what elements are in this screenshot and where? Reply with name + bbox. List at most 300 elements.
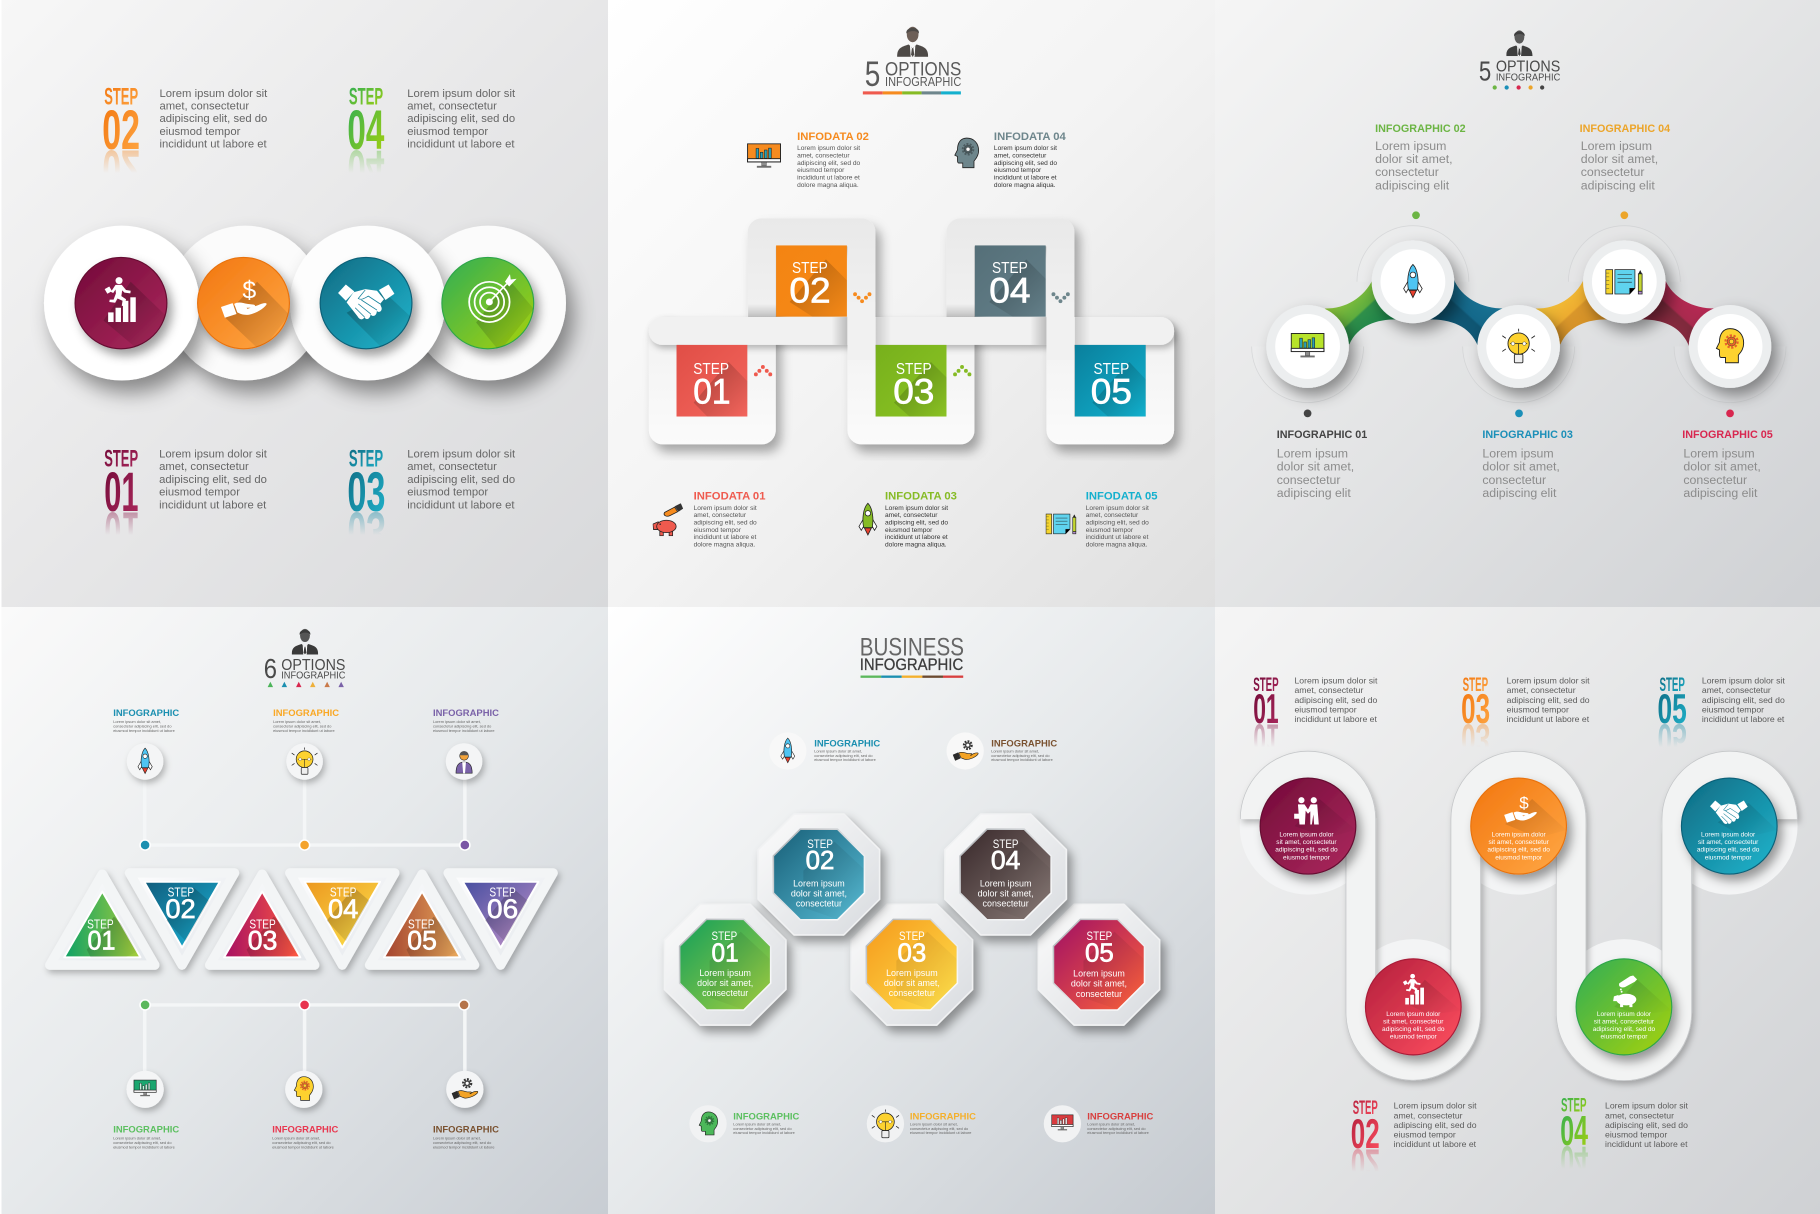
step 04 text: Lorem ipsum dolor sit (1605, 1101, 1689, 1111)
infographic 05: adipiscing elit (1683, 486, 1758, 500)
big white circle 3 (290, 226, 445, 381)
infographic 03: Lorem ipsum (1482, 447, 1554, 461)
step 02 text: amet, consectetur (1394, 1110, 1463, 1120)
panel: six triangles (50, 629, 553, 1150)
top caption 1: consectetur adipiscing elit, sed do (113, 724, 172, 729)
step 03 label: STEP (349, 447, 383, 472)
band shadows near crossings (832, 317, 1090, 345)
octagon step 01: Lorem ipsum (699, 968, 751, 978)
infodata 02: adipiscing elit, sed do (797, 160, 861, 167)
step 02 label: 02 (1351, 1111, 1380, 1157)
node step 02: Lorem ipsum dolor (1386, 1011, 1441, 1018)
infodata 03: dolore magna aliqua. (885, 541, 947, 548)
ribbon: legs crossing over band (847, 302, 1074, 360)
title: 6 options infographic: OPTIONS (281, 657, 345, 674)
triangle step 03: STEP (249, 916, 276, 931)
octagon step 01: 01 (712, 940, 739, 968)
step 04 label: 04 (347, 139, 384, 200)
infographic 05 (1682, 429, 1773, 500)
octagon step 03: 03 (897, 940, 926, 968)
node step 01: adipiscing elit, sed do (1275, 847, 1338, 854)
step numbers on squares: STEP (992, 260, 1028, 277)
octagon step 02 (758, 814, 880, 935)
bottom caption 3: Lorem ipsum dolor sit amet, (433, 1136, 481, 1141)
top caption 2: eiusmod tempor incididunt ut labore (273, 728, 335, 733)
infodata 01: eiusmod tempor (694, 527, 742, 534)
bottom caption 3: eiusmod tempor incididunt ut labore (433, 1145, 494, 1150)
octagon step 01: consectetur (702, 988, 748, 998)
step 04 text: eiusmod tempor (407, 126, 488, 138)
infodata 01: incididunt ut labore et (694, 534, 756, 541)
item: monitor: consectetur adipiscing elit, sed do (1087, 1126, 1146, 1131)
connector amber (1536, 279, 1607, 345)
serpentine band outline (1255, 766, 1783, 1066)
item: rocket: INFOGRAPHIC (814, 738, 880, 749)
step 05 text: amet, consectetur (1702, 685, 1771, 695)
infographic 05: consectetur (1683, 473, 1747, 487)
node 2 rocket (1372, 240, 1454, 323)
bottom caption 2: consectetur adipiscing elit, sed do (272, 1140, 331, 1145)
connector green (1325, 279, 1396, 345)
step 04 text: incididunt ut labore et (1605, 1139, 1688, 1149)
top caption 1: INFOGRAPHIC (113, 707, 179, 718)
infographic 01: consectetur (1277, 473, 1341, 487)
infodata 03: incididunt ut labore et (885, 534, 948, 541)
node step 02: eiusmod tempor (1390, 1034, 1438, 1041)
node step 04: eiusmod tempor (1601, 1034, 1648, 1041)
step 03 text: adipiscing elit, sed do (407, 474, 515, 486)
infodata 02: amet, consectetur (797, 153, 850, 160)
infodata 02: Lorem ipsum dolor sit (797, 145, 860, 152)
ribbon: horizontal band (649, 317, 1174, 345)
infodata 02 (797, 131, 869, 189)
step 03 text: adipiscing elit, sed do (1507, 695, 1590, 705)
infographic 01 (1277, 429, 1367, 500)
step 03 text: Lorem ipsum dolor sit (407, 449, 516, 461)
node step 04: sit amet, consectetur (1594, 1018, 1655, 1025)
step 01 label: STEP (104, 447, 138, 472)
octagon step 03: STEP (899, 930, 925, 943)
step 01 label (104, 447, 138, 562)
infodata 02: incididunt ut labore et (797, 174, 860, 181)
infodata 04: incididunt ut labore et (994, 174, 1057, 181)
connector lines (145, 779, 465, 1072)
leg shadows above band (748, 304, 975, 317)
step numbers on squares: STEP (1094, 361, 1129, 378)
step 04 text: amet, consectetur (407, 100, 497, 112)
step 02 text: incididunt ut labore et (1394, 1139, 1477, 1149)
step 04 label (1560, 1095, 1588, 1184)
triangle step 06: STEP (489, 885, 516, 900)
infodata 05: Lorem ipsum dolor sit (1086, 505, 1149, 512)
disc: climbing runner (75, 257, 167, 351)
octagon step 02: 02 (806, 847, 834, 875)
node step 03: Lorem ipsum dolor (1492, 832, 1547, 839)
bottom caption 2 (272, 1124, 339, 1150)
triangle step 05: STEP (408, 916, 435, 931)
node step 02 (1365, 959, 1461, 1055)
octagon step 02: consectetur (796, 899, 842, 909)
node step 01: eiusmod tempor (1283, 854, 1331, 861)
step 04 text: amet, consectetur (1605, 1110, 1674, 1120)
step 02 label: 02 (102, 99, 140, 161)
node 4 notepad (1583, 240, 1666, 323)
infodata 04: dolore magna aliqua. (994, 182, 1056, 189)
triangle step 04: STEP (330, 885, 356, 900)
step 01 text: incididunt ut labore et (1294, 714, 1378, 724)
top caption 1: Lorem ipsum dolor sit amet, (113, 719, 161, 724)
node 1 monitor (1266, 305, 1349, 388)
title: 6 options infographic: INFOGRAPHIC (281, 671, 345, 682)
infodata 03: adipiscing elit, sed do (885, 519, 948, 526)
octagon step 05: STEP (1087, 930, 1112, 943)
background: panel 4 (2, 607, 608, 1214)
node step 04: Lorem ipsum dolor (1597, 1011, 1652, 1018)
octagon step 05 (1038, 904, 1160, 1025)
node step 03 (1471, 778, 1566, 874)
node step 05: sit amet, consectetur (1698, 839, 1759, 846)
background: panel 6 (1215, 607, 1820, 1214)
top caption 3: eiusmod tempor incididunt ut labore (433, 728, 494, 733)
infodata 03: amet, consectetur (885, 512, 938, 519)
step 04 label: 04 (347, 99, 384, 161)
node step 05 (1681, 778, 1777, 874)
item: rocket: consectetur adipiscing elit, sed do (814, 753, 873, 758)
octagon step 04 (945, 814, 1066, 935)
title: 5 options infographic: 5 (865, 55, 880, 94)
colour bar (861, 676, 963, 678)
node 3 bulb (1477, 305, 1560, 388)
node step 02: sit amet, consectetur (1383, 1018, 1444, 1025)
octagon step 04: Lorem ipsum (980, 879, 1031, 888)
triangle step 02: STEP (168, 885, 194, 900)
item: rocket (769, 732, 880, 770)
infographic 04 (1580, 123, 1670, 192)
item: bulb: eiusmod tempor incididunt ut labore (910, 1130, 971, 1135)
item: head (689, 1105, 800, 1142)
colour bar (863, 91, 961, 94)
triangle step 01 (50, 874, 155, 965)
step 03 text: amet, consectetur (1507, 685, 1576, 695)
bottom caption 2: Lorem ipsum dolor sit amet, (272, 1136, 320, 1141)
panel: wavy connected circles (1252, 30, 1786, 500)
infodata 01: Lorem ipsum dolor sit (694, 505, 757, 512)
infographic 03 (1482, 429, 1573, 500)
step 04 text: incididunt ut labore et (407, 139, 515, 151)
node step 05: Lorem ipsum dolor (1701, 832, 1756, 839)
background: panel 3 (1215, 0, 1820, 607)
step 04 label: STEP (349, 85, 383, 111)
step 04 text: adipiscing elit, sed do (1605, 1120, 1688, 1130)
step 01 label: 01 (104, 501, 138, 562)
top caption 2: consectetur adipiscing elit, sed do (273, 724, 331, 729)
infodata 01: amet, consectetur (694, 512, 747, 519)
item: monitor: eiusmod tempor incididunt ut labore (1087, 1130, 1149, 1135)
step 04 label: 04 (1560, 1138, 1588, 1184)
step 02 text: Lorem ipsum dolor sit (159, 88, 268, 100)
title: 6 options infographic (264, 653, 345, 684)
octagon step 01: STEP (712, 930, 737, 943)
step 03 label: STEP (1463, 675, 1488, 696)
title: 5 options infographic: INFOGRAPHIC (885, 74, 962, 89)
triangle step 03: 03 (248, 925, 277, 956)
bottom caption 1: INFOGRAPHIC (113, 1124, 179, 1135)
octagon step 05: Lorem ipsum (1073, 969, 1125, 979)
icon circle: hand with gear (446, 1071, 484, 1108)
octagon step 02: dolor sit amet, (791, 889, 847, 899)
step 01 text: amet, consectetur (1294, 685, 1364, 695)
infographic 05: Lorem ipsum (1683, 447, 1755, 461)
step 04 label (347, 85, 384, 200)
item: hand with gear: Lorem ipsum dolor sit amet, (991, 749, 1039, 754)
node step 04: adipiscing elit, sed do (1593, 1026, 1656, 1033)
coloured triangles (268, 682, 344, 687)
top caption 2: Lorem ipsum dolor sit amet, (273, 719, 321, 724)
top caption 3: Lorem ipsum dolor sit amet, (433, 719, 481, 724)
marker dots (1304, 211, 1734, 417)
panel: business octagons (664, 633, 1160, 1142)
step 05 square (1075, 345, 1146, 417)
step 01 square (677, 345, 747, 417)
infographic 04: adipiscing elit (1581, 178, 1655, 192)
item: rocket: eiusmod tempor incididunt ut labore (814, 757, 876, 762)
infodata 03: eiusmod tempor (885, 527, 933, 534)
item: bulb: Lorem ipsum dolor sit amet, (910, 1122, 958, 1127)
top caption 3 (433, 707, 499, 733)
icon: head with gear (955, 138, 979, 168)
step 01 text: eiusmod tempor (1294, 704, 1357, 714)
octagon step 05: dolor sit amet, (1071, 979, 1127, 989)
ribbon: vertical loop (663, 232, 1160, 430)
step 02 label (102, 85, 140, 200)
infodata 05 (1086, 491, 1158, 548)
infographic 02 (1375, 123, 1466, 192)
panel: serpentine timeline (1240, 675, 1798, 1186)
octagon step 02: STEP (807, 838, 833, 851)
step 01 label: STEP (1253, 675, 1279, 696)
step 05 label: 05 (1658, 716, 1687, 762)
octagon step 02: Lorem ipsum (793, 879, 845, 888)
item: head: eiusmod tempor incididunt ut labore (733, 1130, 795, 1135)
icon: monitor orange (748, 144, 781, 168)
title: 6 options infographic: 6 (264, 653, 277, 684)
step 05 label (1658, 675, 1687, 762)
bottom caption 1: consectetur adipiscing elit, sed do (113, 1140, 172, 1145)
step 03 text: incididunt ut labore et (407, 499, 515, 511)
step 01 text: amet, consectetur (159, 461, 249, 473)
title: 5 options infographic: OPTIONS (1496, 59, 1560, 76)
item: hand with gear (946, 732, 1057, 770)
node 5 head (1689, 305, 1771, 388)
disc: hand with dollar: $ (242, 278, 256, 304)
step 03 label: 03 (347, 501, 385, 562)
infographic 03: INFOGRAPHIC 03 (1482, 429, 1573, 441)
step 02 label: 02 (102, 139, 140, 200)
triangle step 01: STEP (87, 916, 114, 931)
step numbers on squares: STEP (896, 361, 932, 378)
item: monitor (1044, 1105, 1154, 1142)
icon circle: bulb (286, 743, 323, 780)
step 01 label: 01 (1253, 716, 1279, 762)
node step 01: sit amet, consectetur (1276, 839, 1337, 846)
item: bulb: INFOGRAPHIC (910, 1111, 976, 1122)
infographic 01: INFOGRAPHIC 01 (1277, 429, 1367, 441)
big white circle 1 (44, 226, 200, 381)
bottom caption 3 (433, 1124, 499, 1150)
infodata 05: eiusmod tempor (1086, 527, 1134, 534)
top caption 2 (273, 707, 339, 733)
step 02 text: adipiscing elit, sed do (1394, 1120, 1477, 1130)
step 02 text: incididunt ut labore et (159, 139, 268, 151)
icon: green rocket (859, 503, 877, 535)
node step 03: $ (1519, 793, 1529, 812)
icon circle: monitor (126, 1071, 164, 1108)
infographic 02: adipiscing elit (1375, 178, 1450, 192)
top caption 1: eiusmod tempor incididunt ut labore (113, 728, 175, 733)
octagon step 04: dolor sit amet, (978, 889, 1034, 899)
octagon step 04: STEP (993, 838, 1019, 851)
step 02 label: STEP (1353, 1098, 1378, 1119)
step 05 label: STEP (1659, 675, 1685, 696)
step numbers on squares: 05 (1091, 373, 1132, 412)
triangle step 02 (130, 873, 235, 965)
infodata 04: adipiscing elit, sed do (994, 160, 1057, 167)
title: 5 options infographic: INFOGRAPHIC (1496, 73, 1560, 84)
bottom caption 2: eiusmod tempor incididunt ut labore (272, 1145, 334, 1150)
step numbers on squares: STEP (792, 260, 828, 277)
serpentine band (1255, 766, 1783, 1066)
step numbers on squares: 04 (989, 271, 1031, 310)
item: hand with gear: INFOGRAPHIC (991, 738, 1057, 749)
step 03 label: 03 (1461, 686, 1490, 732)
connector red (1640, 279, 1715, 346)
triangle step 02: 02 (165, 893, 196, 924)
icon: piggy bank (653, 503, 683, 536)
icon circle: person (446, 743, 482, 780)
node step 05: adipiscing elit, sed do (1697, 847, 1760, 854)
step 03 text: eiusmod tempor (407, 487, 488, 499)
title: business infographic (860, 633, 964, 674)
bottom caption 3: consectetur adipiscing elit, sed do (433, 1140, 491, 1145)
background: panel 1 (2, 0, 608, 607)
infographic 04: dolor sit amet, (1581, 152, 1658, 166)
infodata 01: INFODATA 01 (694, 491, 765, 503)
step 03 label: 03 (347, 461, 385, 523)
step 04 label: 04 (1560, 1108, 1588, 1154)
item: head: consectetur adipiscing elit, sed do (733, 1126, 792, 1131)
step 03 text: eiusmod tempor (1507, 704, 1569, 714)
infographic 04: consectetur (1581, 165, 1645, 179)
triangle step 06 (448, 873, 553, 965)
title: 5 options infographic (865, 55, 962, 94)
item: head: INFOGRAPHIC (733, 1111, 800, 1122)
infographic 05: dolor sit amet, (1683, 460, 1761, 474)
infographic 04: Lorem ipsum (1581, 139, 1652, 153)
step 02 label: 02 (1351, 1140, 1380, 1186)
step 03 label (347, 447, 385, 562)
step 01 text: incididunt ut labore et (159, 499, 267, 511)
step 03 text: amet, consectetur (407, 461, 497, 473)
top caption 3: consectetur adipiscing elit, sed do (433, 724, 491, 729)
step 01 text: adipiscing elit, sed do (1294, 695, 1378, 705)
infodata 01 (694, 491, 765, 548)
icon circle: head (285, 1071, 322, 1108)
disc: target (442, 257, 534, 351)
step 01 text: Lorem ipsum dolor sit (159, 449, 268, 461)
infodata 01: dolore magna aliqua. (694, 541, 755, 548)
top dots (140, 840, 470, 850)
infodata 04 (994, 131, 1067, 189)
item: monitor: INFOGRAPHIC (1087, 1111, 1154, 1122)
infodata 02: eiusmod tempor (797, 167, 845, 174)
bottom caption 3: INFOGRAPHIC (433, 1124, 499, 1135)
item: hand with gear: consectetur adipiscing elit, sed do (991, 753, 1050, 758)
node step 03: sit amet, consectetur (1488, 839, 1550, 846)
infographic 03: adipiscing elit (1482, 486, 1557, 500)
faint halo arcs (1252, 226, 1786, 403)
coloured dots (1493, 85, 1544, 90)
node step 05: eiusmod tempor (1705, 854, 1752, 861)
infodata 02: INFODATA 02 (797, 131, 869, 143)
infographic 02: consectetur (1375, 165, 1439, 179)
bottom caption 1: Lorem ipsum dolor sit amet, (113, 1136, 161, 1141)
step numbers on squares (693, 260, 1132, 412)
step 02 text: Lorem ipsum dolor sit (1394, 1101, 1477, 1111)
octagon step 03 (851, 904, 973, 1025)
step 02 label: STEP (104, 85, 138, 111)
step numbers on squares: 01 (693, 373, 731, 412)
infographic 05: INFOGRAPHIC 05 (1682, 429, 1773, 441)
infographic 01: adipiscing elit (1277, 486, 1351, 500)
step 01 label: 01 (1253, 686, 1279, 732)
triangle step 05 (370, 874, 475, 965)
background: panel 2 (608, 0, 1215, 607)
infographic 02: Lorem ipsum (1375, 139, 1446, 153)
step 01 text: eiusmod tempor (159, 487, 240, 499)
node step 04 (1576, 959, 1672, 1055)
item: head: Lorem ipsum dolor sit amet, (733, 1122, 781, 1127)
step 01 label (1253, 675, 1279, 762)
infodata 03: INFODATA 03 (885, 491, 957, 503)
step 03 text: Lorem ipsum dolor sit (1507, 676, 1590, 686)
infographic 02: dolor sit amet, (1375, 152, 1453, 166)
step 05 text: eiusmod tempor (1702, 704, 1764, 714)
disc: handshake (320, 257, 413, 351)
big white circle 4 (410, 226, 566, 381)
infodata 02: dolore magna aliqua. (797, 182, 859, 189)
title: 5 options infographic (1479, 55, 1560, 87)
octagon step 04: consectetur (983, 899, 1029, 909)
dotted chevrons (754, 292, 1070, 376)
node step 01 (1260, 778, 1356, 874)
bottom caption 2: INFOGRAPHIC (272, 1124, 339, 1135)
top caption 3: INFOGRAPHIC (433, 707, 499, 718)
step 02 text: eiusmod tempor (159, 126, 241, 138)
item: bulb (867, 1105, 976, 1142)
octagon step 04: 04 (991, 847, 1020, 875)
infodata 01: adipiscing elit, sed do (694, 519, 757, 526)
step numbers on squares: 02 (789, 271, 831, 310)
step 02 text: amet, consectetur (159, 100, 249, 112)
octagon step 01: dolor sit amet, (697, 978, 753, 988)
title: business infographic: BUSINESS (860, 633, 964, 661)
connector teal (1429, 279, 1504, 346)
infodata 03 (885, 491, 957, 548)
octagon step 03: dolor sit amet, (884, 978, 940, 988)
step 01 text: Lorem ipsum dolor sit (1294, 676, 1378, 686)
step 03 label (1461, 675, 1490, 762)
infographic 03: consectetur (1482, 473, 1546, 487)
